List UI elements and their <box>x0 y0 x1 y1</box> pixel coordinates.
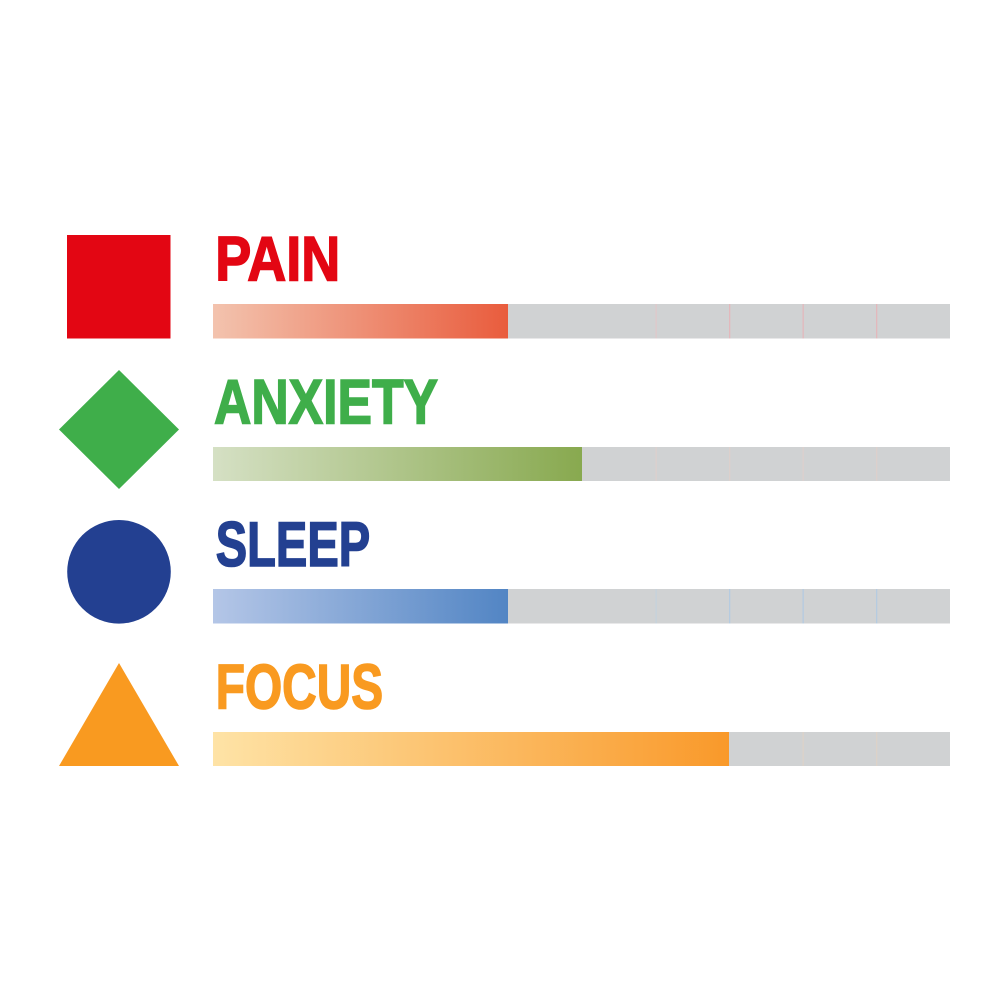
icon: blue circle <box>67 520 171 624</box>
progress bar: sleep <box>213 589 950 624</box>
icon: red square <box>67 235 170 338</box>
heading: sleep: SLEEP <box>216 510 370 580</box>
heading: pain: PAIN <box>215 224 340 294</box>
icon: orange triangle <box>59 663 179 766</box>
row: focus <box>59 652 950 766</box>
icon: green diamond <box>59 370 179 489</box>
progress bar: focus <box>213 732 950 766</box>
row: pain <box>67 224 950 338</box>
progress bar: anxiety <box>213 447 950 481</box>
heading: focus: FOCUS <box>216 652 383 722</box>
progress bar: pain <box>213 304 950 338</box>
row: sleep <box>67 510 950 624</box>
heading: anxiety: ANXIETY <box>214 368 438 438</box>
row: anxiety <box>59 368 950 489</box>
